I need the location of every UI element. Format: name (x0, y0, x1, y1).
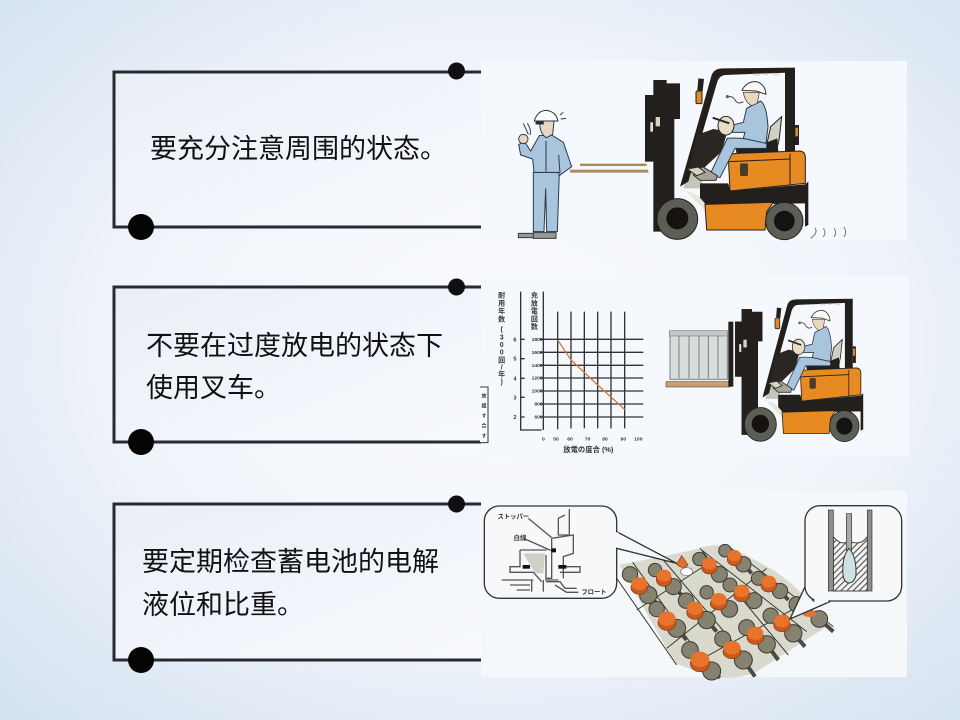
chart: discharge depth versus cycles: ) (501, 379, 503, 386)
chart: discharge depth versus cycles: 600 (534, 415, 543, 421)
text: over-discharge warning: 不要在过度放电的状态下 (146, 331, 443, 361)
chart: discharge depth versus cycles: 0 (542, 437, 545, 443)
chart: discharge depth versus cycles: ( (501, 326, 504, 333)
chart: discharge depth versus cycles: 3 (500, 334, 504, 341)
chart: discharge depth versus cycles: 100 (634, 437, 643, 443)
image panel: worker and forklift (481, 61, 907, 240)
note box fragment (480, 387, 488, 443)
chart: discharge depth versus cycles: 数 (531, 322, 538, 331)
chart: discharge depth versus cycles: 充 (531, 290, 538, 299)
chart: discharge depth versus cycles: 4 (513, 376, 517, 382)
note box fragment: す (482, 412, 487, 419)
text: electrolyte inspection: 液位和比重。 (142, 590, 304, 620)
chart: discharge depth versus cycles: 回 (498, 356, 505, 364)
callout: electrolyte level detail (790, 506, 902, 619)
chart: discharge depth versus cycles: 用 (498, 299, 505, 307)
image panel: discharge chart and loaded forklift (480, 276, 909, 456)
chart: discharge depth versus cycles: 60 (567, 437, 573, 443)
chart: discharge depth versus cycles: 回 (531, 315, 538, 323)
text: over-discharge warning: 使用叉车。 (146, 373, 281, 403)
chart: discharge depth versus cycles: 2 (513, 415, 517, 421)
chart: discharge depth versus cycles: 800 (534, 402, 543, 408)
chart: discharge depth versus cycles: 1000 (532, 389, 543, 395)
callout: stopper and float detail: ストッパー (498, 513, 529, 521)
chart: discharge depth versus cycles: 放電の度合 (%) (563, 445, 614, 454)
panel: electrolyte inspection text frame (114, 496, 481, 673)
chart: discharge depth versus cycles: 放 (531, 298, 538, 307)
icon: crate on forks (666, 322, 733, 387)
icon: forklift with driver (645, 68, 808, 240)
image panel: battery cells and close-up callouts (481, 491, 907, 680)
chart: discharge depth versus cycles (498, 290, 643, 454)
battery cell array (617, 544, 833, 680)
chart: discharge depth versus cycles: 90 (621, 437, 626, 443)
chart: discharge depth versus cycles: 数 (498, 314, 505, 323)
chart: discharge depth versus cycles: 50 (553, 437, 559, 443)
chart: discharge depth versus cycles: 0 (500, 350, 504, 357)
chart: discharge depth versus cycles: 年 (498, 306, 505, 315)
text: surroundings caution: 要充分注意周围的状态。 (150, 134, 447, 164)
icon: standing worker (518, 110, 572, 238)
chart: discharge depth versus cycles: 0 (500, 342, 504, 349)
chart: discharge depth versus cycles: 5 (513, 357, 517, 363)
note box fragment: 放 (482, 392, 487, 399)
callout: stopper and float detail: 白線 (514, 533, 527, 542)
icon: forklift with driver (735, 299, 863, 442)
note box fragment: 組 (482, 402, 487, 409)
callout: stopper and float detail: フロート (581, 588, 607, 596)
chart: discharge depth versus cycles: 耐 (498, 290, 505, 299)
chart: discharge depth versus cycles: 1600 (532, 350, 543, 356)
chart: discharge depth versus cycles: 1800 (532, 337, 543, 343)
callout: stopper and float detail (484, 506, 677, 598)
chart: discharge depth versus cycles: 電 (531, 307, 538, 315)
chart: discharge depth versus cycles: 1200 (532, 376, 543, 382)
panel: over-discharge warning text frame (114, 278, 481, 455)
chart: discharge depth versus cycles: 6 (513, 337, 517, 343)
chart: discharge depth versus cycles: 3 (513, 395, 517, 401)
chart: discharge depth versus cycles: 70 (585, 437, 591, 443)
note box fragment: す (482, 432, 487, 439)
chart: discharge depth versus cycles: 80 (602, 437, 608, 443)
icon: forklift forks (570, 164, 648, 173)
icon: motion marks (811, 227, 846, 238)
note box fragment: 合 (482, 422, 487, 429)
text: electrolyte inspection: 要定期检查蓄电池的电解 (142, 547, 439, 577)
chart: discharge depth versus cycles: / (501, 365, 503, 372)
panel: surroundings caution text frame (114, 62, 481, 240)
chart: discharge depth versus cycles: 年 (498, 370, 505, 379)
chart: discharge depth versus cycles: 1400 (532, 363, 543, 369)
